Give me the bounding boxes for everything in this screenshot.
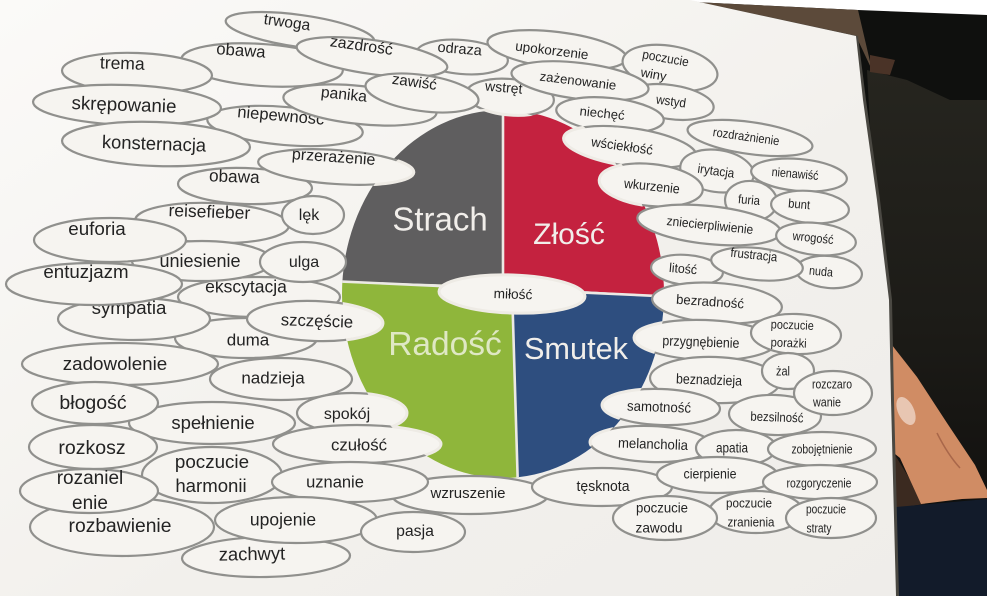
- bubble: apatia: apatia: [716, 441, 748, 456]
- bubble: ekscytacja: ekscytacja: [205, 277, 287, 297]
- bubble: błogość: [32, 382, 158, 424]
- bubble: poczucie straty: poczucie: [806, 502, 846, 516]
- bubble: bezradność: bezradność: [676, 292, 745, 311]
- bubble: upojenie: upojenie: [250, 510, 316, 530]
- bubble: zachwyt: zachwyt: [219, 543, 285, 565]
- bubble: spełnienie: spełnienie: [171, 412, 255, 433]
- bubble: furia: furia: [738, 192, 761, 208]
- bubble: ekscytacja: [178, 277, 340, 317]
- bubble: sympatia: sympatia: [92, 297, 167, 318]
- bubble: obawa (2): obawa: [209, 165, 260, 187]
- bubble: rozanielenie: enie: [72, 493, 108, 514]
- bubble: bunt: [770, 188, 850, 226]
- bubble: spokój: spokój: [324, 406, 370, 423]
- bubble: miłość: miłość: [493, 286, 533, 302]
- bubble: rozczarowanie: rozczaro: [812, 377, 852, 391]
- bubble: cierpienie: cierpienie: [684, 467, 736, 482]
- bubble: zniecierpliwienie: [635, 199, 783, 251]
- bubble: poczucie winy: poczucie: [641, 47, 690, 70]
- bubble: nienawiść: nienawiść: [771, 165, 819, 183]
- bubble: bezsilność: bezsilność: [750, 409, 804, 425]
- bubble: upokorzenie: [485, 24, 629, 76]
- bubble: skrępowanie: skrępowanie: [71, 92, 177, 117]
- bubble: panika: [281, 78, 439, 132]
- bubble: euforia: euforia: [68, 218, 126, 239]
- bubble: nienawiść: [750, 155, 848, 195]
- bubble: entuzjazm: entuzjazm: [43, 261, 129, 282]
- bubble: wkurzenie: wkurzenie: [622, 176, 681, 197]
- bubble: pasja: [361, 512, 465, 552]
- bubble: szczęście: [246, 299, 384, 343]
- bubble: lęk: [282, 196, 344, 234]
- bubble: przerażenie: [257, 148, 416, 186]
- icon: hand holding the sheet: [884, 340, 987, 504]
- bubble: obawa: obawa: [216, 39, 267, 62]
- bubble: ulga: ulga: [289, 254, 319, 271]
- bubble: wzruszenie: wzruszenie: [429, 485, 506, 502]
- bubble: rozgoryczenie: [763, 465, 877, 499]
- bubble: niechęć: [555, 92, 665, 138]
- bubble: rozgoryczenie: rozgoryczenie: [786, 476, 852, 490]
- bubble: apatia: [696, 430, 776, 466]
- bubble: rozkosz: [29, 425, 157, 469]
- bubble: poczucie harmonii: harmonii: [175, 475, 247, 496]
- bubble: wstyd: wstyd: [654, 91, 687, 111]
- bubble: litość: [650, 252, 724, 288]
- bubble: wkurzenie: [598, 162, 704, 208]
- bubble: poczucie straty: straty: [806, 521, 832, 535]
- bubble: przerażenie: przerażenie: [291, 146, 376, 169]
- quadrant: Złość: [504, 114, 664, 294]
- bubble: rozczarowanie: wanie: [812, 395, 841, 409]
- bubble: poczucie porażki: [750, 312, 842, 356]
- bubble: zazdrość: [294, 29, 450, 84]
- bubble: wrogość: [775, 219, 857, 259]
- bubble: rozdrażnienie: [685, 113, 815, 163]
- bubble: obawa (2): [177, 164, 313, 206]
- bubble: irytacja: [677, 145, 757, 197]
- bubble: litość: litość: [669, 260, 698, 277]
- bubble: poczucie harmonii: [142, 447, 282, 503]
- bubble: zażenowanie: zażenowanie: [539, 69, 617, 93]
- bubble: entuzjazm: [6, 261, 182, 305]
- bubble: poczucie porażki: poczucie: [771, 317, 814, 333]
- bubble: nuda: [795, 253, 863, 291]
- chart: four emotion quadrants: [342, 111, 664, 478]
- bubble: frustracja: frustracja: [730, 245, 779, 265]
- bubble: nadzieja: nadzieja: [241, 368, 305, 387]
- bubble: tęsknota: tęsknota: [576, 479, 630, 495]
- bubble: bezradność: [651, 279, 783, 327]
- bubble: irytacja: irytacja: [697, 161, 736, 181]
- bubble: czułość: [273, 425, 441, 463]
- divider lines: [342, 116, 652, 478]
- bubble: rozanielenie: rozaniel: [57, 468, 123, 489]
- bubble: poczucie zranienia: [709, 491, 803, 533]
- bubble: samotność: samotność: [627, 398, 691, 416]
- bubble: spełnienie: [129, 402, 295, 444]
- bubble: rozkosz: rozkosz: [58, 437, 126, 459]
- bubble: wściekłość: [562, 124, 696, 168]
- bubble: wstyd: [624, 79, 716, 125]
- bubble: uniesienie: uniesienie: [159, 251, 241, 271]
- bubble: trema: [61, 50, 213, 96]
- bubble: bunt: bunt: [788, 196, 811, 212]
- bubble: wzruszenie: [392, 476, 548, 514]
- bubble: zadowolenie: zadowolenie: [63, 353, 167, 374]
- bubble: odraza: odraza: [437, 40, 483, 60]
- bubble: nuda: nuda: [808, 264, 834, 280]
- bubble: zobojętnienie: [768, 432, 876, 466]
- bubble: uznanie: [272, 462, 428, 502]
- bubble: uznanie: uznanie: [306, 473, 364, 491]
- quadrant: Smutek: [514, 291, 664, 478]
- bubble: niepewność: [206, 100, 364, 152]
- bubble: frustracja: [710, 243, 804, 285]
- bubble: zażenowanie: [509, 55, 651, 107]
- bubble: poczucie zranienia: poczucie: [726, 495, 772, 510]
- bubble: furia: [723, 179, 779, 223]
- bubble: poczucie zawodu: [613, 496, 717, 540]
- bubble: żal: żal: [776, 363, 790, 378]
- bubble: rozbawienie: [30, 498, 214, 556]
- bubble: melancholia: [589, 424, 713, 464]
- bubble: sympatia: [58, 297, 210, 340]
- bubble: niepewność: niepewność: [237, 103, 325, 129]
- quadrant: Radość: [342, 282, 518, 478]
- bubble: zobojętnienie: zobojętnienie: [792, 442, 853, 456]
- bubble: cierpienie: [657, 457, 777, 493]
- bubble: samotność: [601, 387, 721, 427]
- bubble: duma: [175, 318, 317, 358]
- bubble: zawiść: [363, 67, 481, 119]
- quadrant: Strach: [342, 111, 502, 284]
- bubble: miłość: [438, 272, 586, 316]
- label: Radość: Radość: [388, 326, 502, 363]
- bubble: ulga: [260, 242, 346, 282]
- bubble: odraza: [415, 36, 509, 78]
- bubble: euforia: [34, 218, 186, 262]
- label: Strach: Strach: [392, 201, 488, 238]
- bubble: zazdrość: zazdrość: [329, 33, 394, 59]
- bubble: tęsknota: [532, 468, 672, 506]
- bubble: nadzieja: [210, 358, 352, 400]
- bubble: zawiść: zawiść: [391, 71, 438, 94]
- bubble: poczucie straty: [786, 498, 876, 538]
- bubble: upojenie: [215, 497, 377, 543]
- bubble: trwoga: [224, 5, 376, 57]
- bubble: poczucie zranienia: zranienia: [728, 514, 775, 529]
- label: Złość: Złość: [533, 218, 605, 251]
- bubble: rozczarowanie: [794, 371, 872, 415]
- bubble: wstręt: wstręt: [484, 77, 523, 97]
- bubble: konsternacja: konsternacja: [102, 131, 207, 156]
- label: Smutek: Smutek: [524, 331, 629, 366]
- bubble: przygnębienie: [632, 318, 771, 359]
- bubble: poczucie harmonii: poczucie: [175, 451, 249, 472]
- bubble: poczucie porażki: porażki: [770, 335, 807, 351]
- bubble: wrogość: wrogość: [791, 229, 834, 247]
- bubble: beznadzieja: beznadzieja: [676, 370, 742, 389]
- bubble: uniesienie: [132, 241, 272, 281]
- bubble: szczęście: szczęście: [281, 310, 353, 332]
- bubble: rozanielenie: [20, 468, 158, 514]
- bubble: pasja: pasja: [396, 523, 434, 540]
- bubble: poczucie zawodu: poczucie: [636, 500, 688, 516]
- bubble: trwoga: trwoga: [263, 11, 312, 34]
- bubble: zadowolenie: [22, 343, 218, 385]
- bubble: zniecierpliwienie: zniecierpliwienie: [666, 213, 754, 237]
- laminated sheet edge: [690, 0, 899, 596]
- bubble: rozdrażnienie: rozdrażnienie: [712, 125, 780, 148]
- bubble: niechęć: niechęć: [579, 103, 626, 123]
- bubble: przygnębienie: przygnębienie: [662, 332, 740, 351]
- bubble: trema: trema: [100, 52, 145, 74]
- bubble: wściekłość: wściekłość: [589, 134, 654, 158]
- bubble: reisefieber: reisefieber: [168, 200, 251, 223]
- bubble: poczucie winy: winy: [639, 64, 668, 84]
- bubble: wstręt: [468, 78, 555, 117]
- bubble: poczucie zawodu: zawodu: [636, 520, 682, 536]
- bubble: rozbawienie: rozbawienie: [69, 516, 171, 537]
- bubble: reisefieber: [134, 199, 290, 246]
- bubble: spokój: [297, 393, 407, 433]
- bubble: beznadzieja: [649, 355, 781, 405]
- bubble: melancholia: melancholia: [618, 435, 688, 453]
- bubble: skrępowanie: [32, 82, 222, 128]
- bubble: bezsilność: [728, 393, 822, 437]
- bubble: panika: panika: [320, 84, 368, 106]
- bubble: konsternacja: [61, 119, 251, 169]
- bubble: zachwyt: [182, 536, 350, 578]
- bubble: upokorzenie: upokorzenie: [514, 39, 589, 62]
- bubble: duma: duma: [227, 330, 270, 349]
- bubble: obawa: [180, 37, 344, 92]
- bubble: czułość: czułość: [331, 435, 387, 454]
- bubble: lęk: lęk: [299, 207, 320, 224]
- bubble: poczucie winy: [619, 38, 721, 98]
- bubble: błogość: błogość: [59, 392, 127, 414]
- bubble: żal: [762, 353, 814, 389]
